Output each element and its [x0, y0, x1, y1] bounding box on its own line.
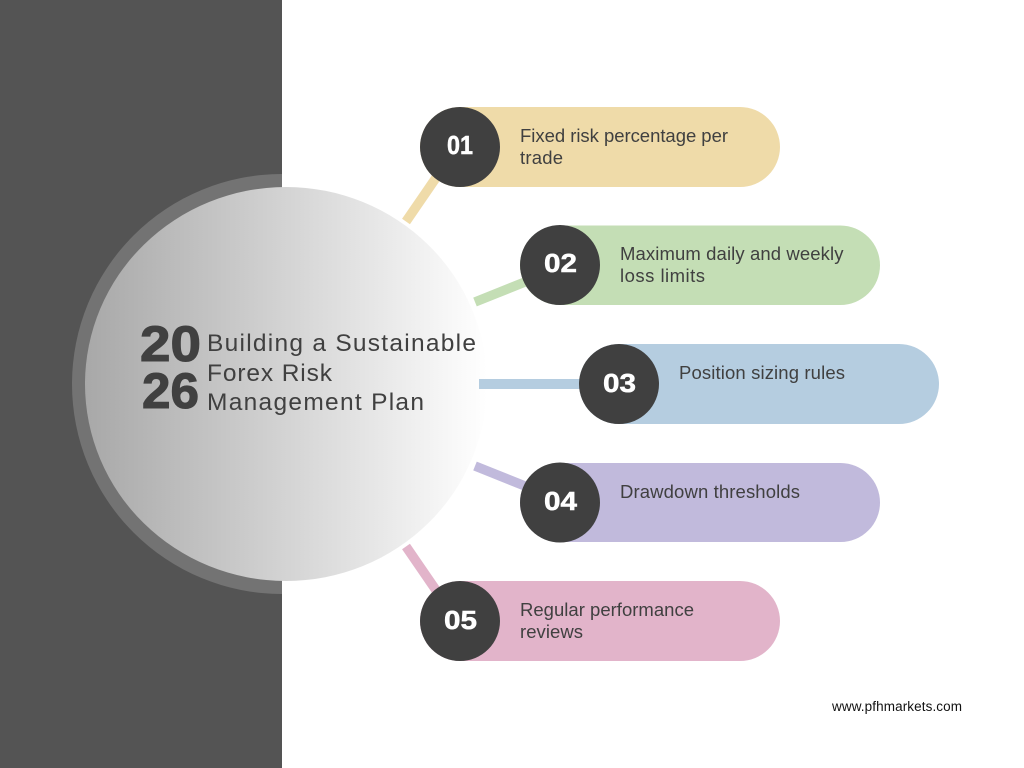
pill 01: [420, 107, 780, 187]
label 04: Drawdown thresholds: [620, 481, 800, 502]
step 03: [479, 344, 939, 424]
step 01: [406, 107, 780, 222]
pill 03: [579, 344, 939, 424]
label 02: loss limits: [620, 265, 705, 286]
step 02: [475, 225, 880, 305]
label 05: Regular performance: [520, 599, 694, 620]
number badge 01: [420, 107, 500, 187]
outer ring of central circle: [72, 174, 282, 594]
central title block: [140, 316, 476, 419]
step 04: [475, 462, 880, 542]
connector 01: [406, 172, 440, 222]
step 05: [406, 546, 780, 661]
number badge 04: 04: [544, 486, 578, 516]
dark left panel: [0, 0, 282, 768]
label 01: Fixed risk percentage per: [520, 125, 728, 146]
label 01: trade: [520, 147, 563, 168]
pill 05: [420, 581, 780, 661]
title: [207, 330, 476, 416]
connector 05: [406, 546, 440, 596]
connector 03: [479, 379, 599, 389]
pill 04: [520, 463, 880, 542]
number badge 04: [520, 462, 600, 542]
central circle: [85, 187, 487, 581]
number badge 01: 01: [447, 130, 473, 160]
connector 02: [475, 278, 535, 302]
label 02: Maximum daily and weekly: [620, 243, 844, 264]
year: 20: [140, 316, 201, 372]
title: Management Plan: [207, 389, 424, 416]
label 01: [520, 125, 728, 168]
title: Building a Sustainable: [207, 330, 476, 357]
label 05: reviews: [520, 621, 583, 642]
number badge 03: 03: [603, 368, 636, 398]
title: Forex Risk: [207, 360, 333, 387]
label 05: [520, 599, 694, 642]
year: [140, 316, 201, 419]
website url: www.pfhmarkets.com: [831, 699, 962, 714]
label 03: Position sizing rules: [679, 362, 845, 383]
number badge 02: [520, 225, 600, 305]
number badge 02: 02: [544, 248, 577, 278]
pill 02: [520, 226, 880, 305]
label 02: [620, 243, 844, 286]
number badge 05: 05: [444, 605, 477, 635]
connector 04: [475, 466, 535, 490]
number badge 05: [420, 581, 500, 661]
number badge 03: [579, 344, 659, 424]
year: 26: [142, 363, 199, 419]
